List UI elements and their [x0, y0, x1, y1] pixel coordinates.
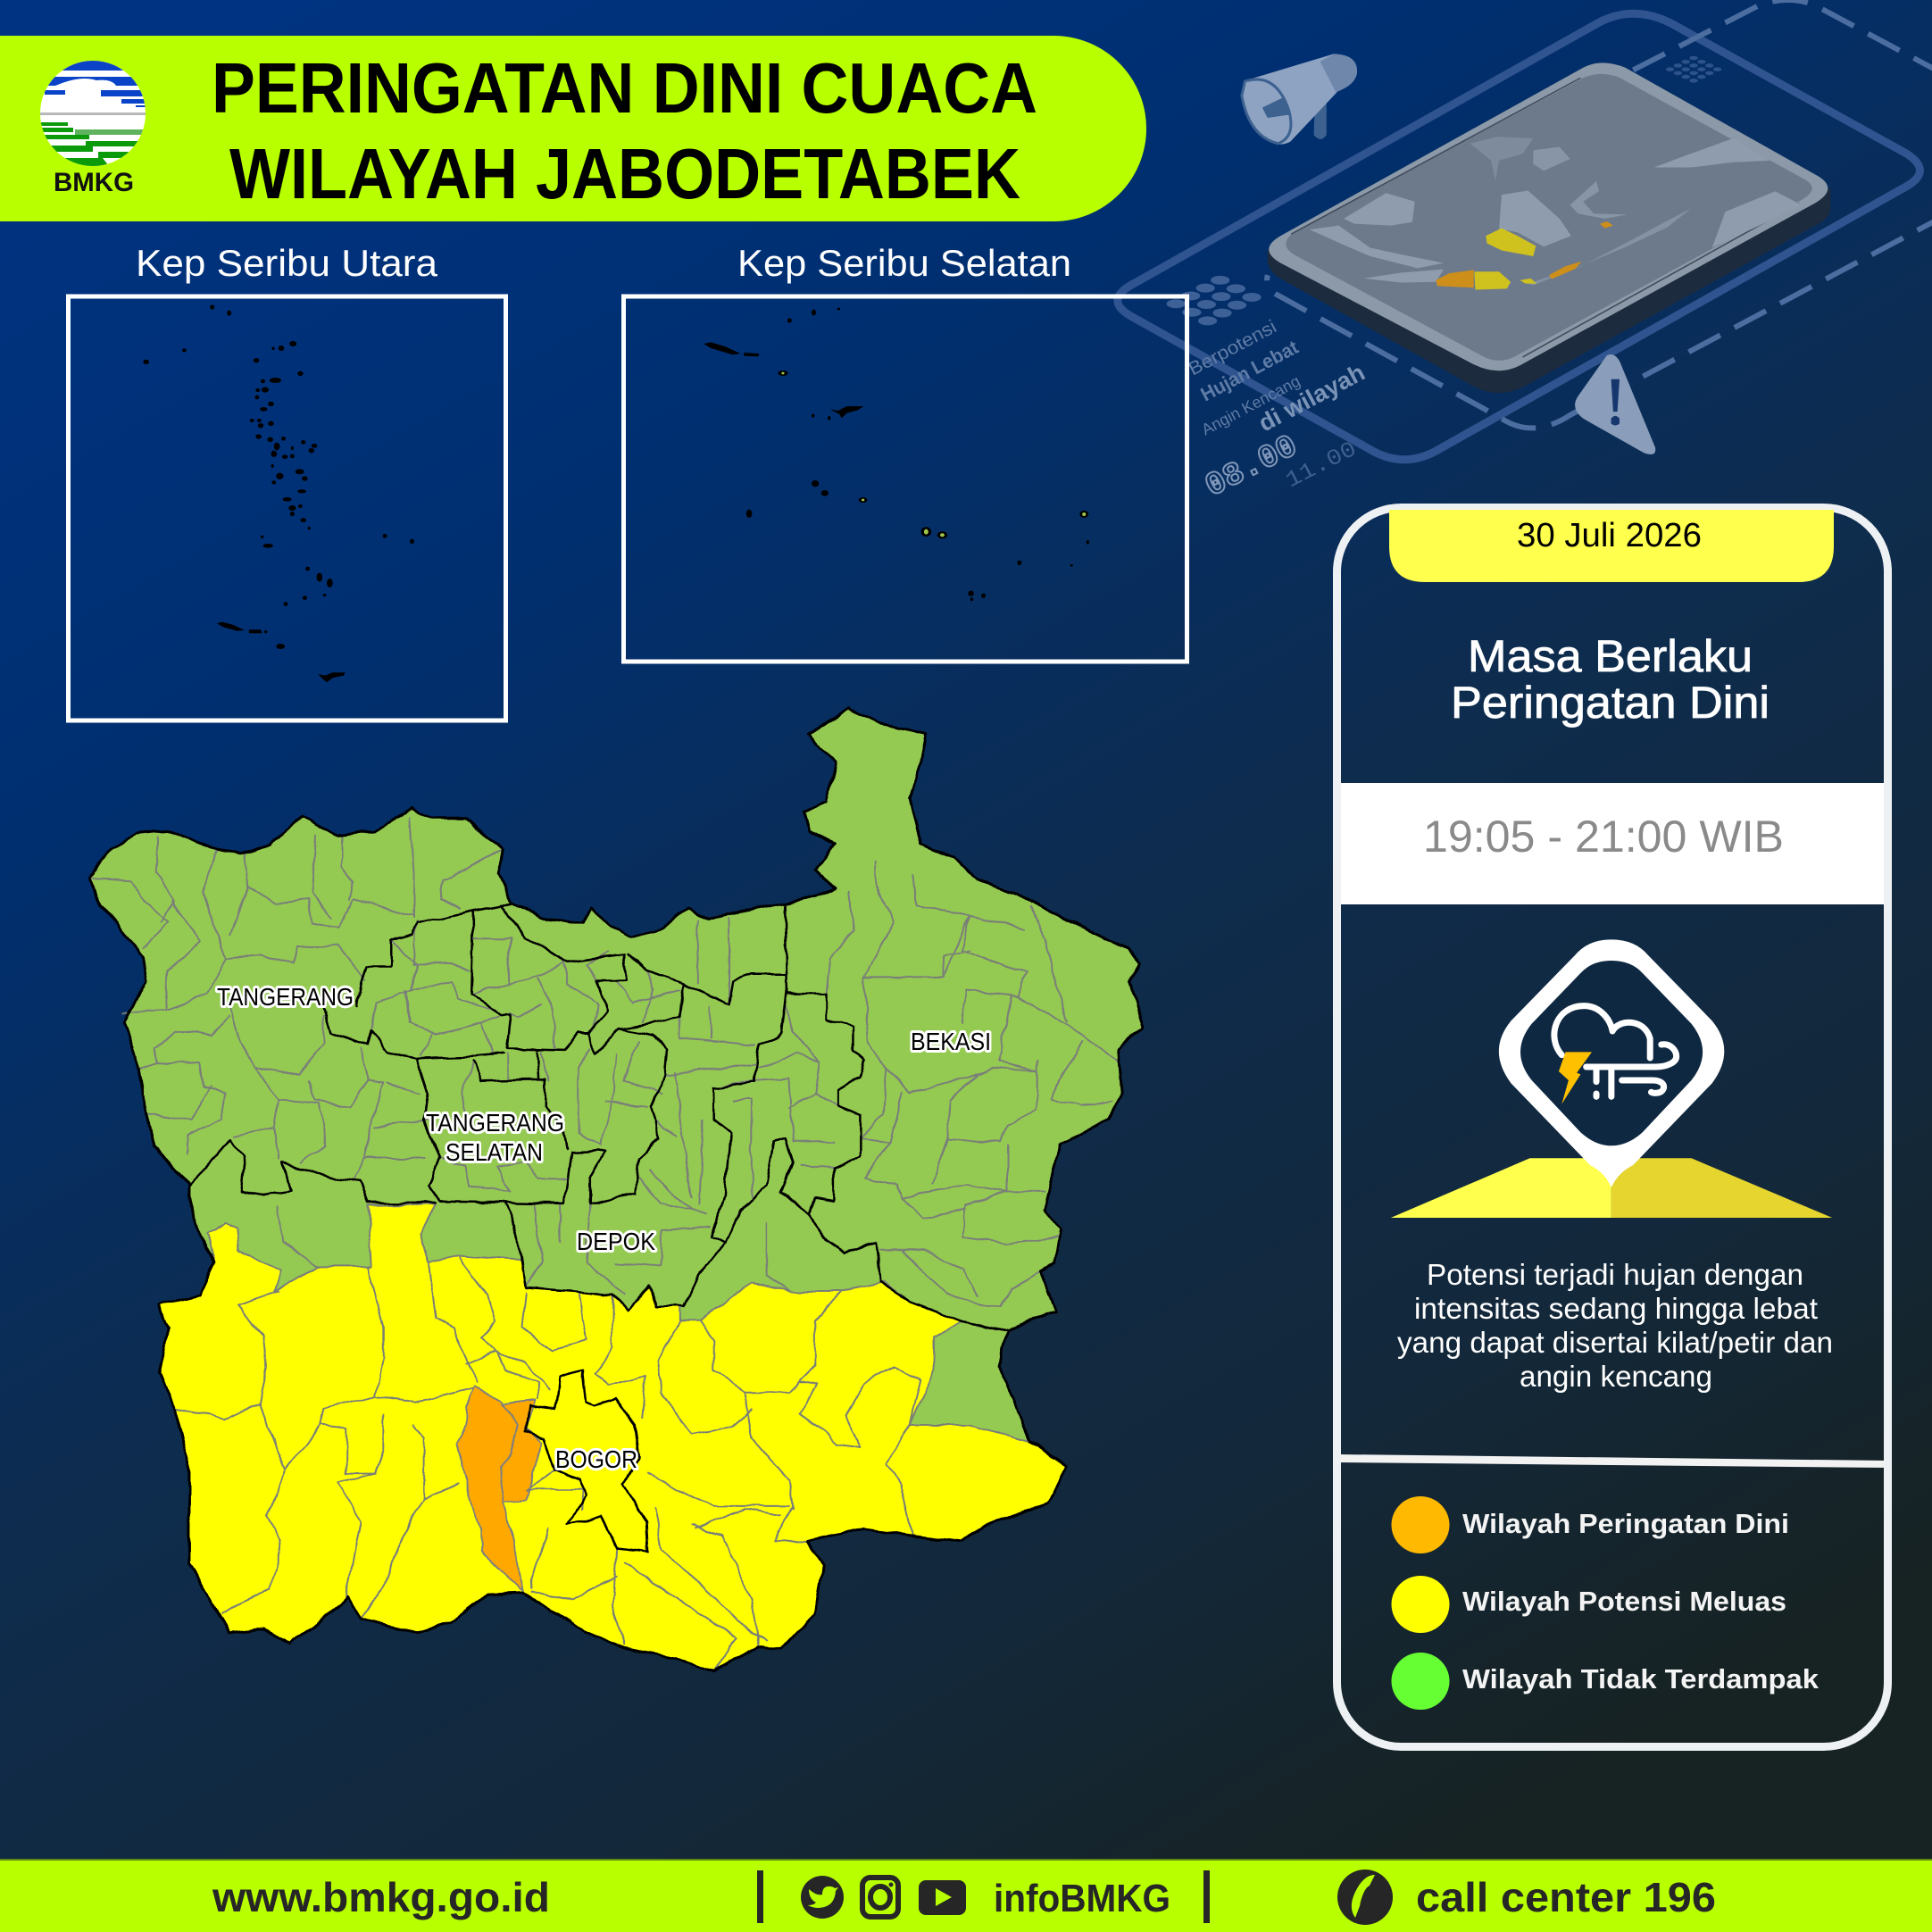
description: angin kencang	[1520, 1360, 1712, 1393]
pedestal	[1391, 1158, 1611, 1218]
megaphone	[1242, 54, 1357, 145]
phone body	[1269, 62, 1828, 371]
icon: instagram	[862, 1878, 898, 1917]
date: 30 Juli 2026	[1517, 517, 1702, 554]
website: www.bmkg.go.id	[212, 1874, 550, 1920]
caption: di wilayah: di wilayah	[1254, 359, 1370, 437]
coastline outline	[88, 708, 1144, 1671]
title line 1: PERINGATAN DINI CUACA	[212, 48, 1037, 128]
legend: Wilayah Potensi Meluas	[1462, 1586, 1786, 1617]
map: Jabodetabek warning zones	[88, 708, 1144, 1671]
heading: validity line 2: Peringatan Dini	[1451, 678, 1770, 728]
phone screen	[1286, 74, 1812, 361]
BMKG wordmark: BMKG	[54, 168, 134, 197]
panel: Kep Seribu Utara inset map	[68, 296, 505, 720]
panel white band	[1337, 783, 1888, 904]
description: intensitas sedang hingga lebat	[1414, 1292, 1818, 1325]
dashed frame outline	[1267, 0, 1932, 428]
map zone: unaffected green	[88, 708, 1144, 1671]
screen edge lines	[1291, 78, 1799, 357]
islands	[704, 308, 1089, 601]
panel outline	[1337, 507, 1887, 1746]
caption: Berpotensi: Berpotensi	[1186, 316, 1280, 379]
legend	[1391, 1496, 1820, 1710]
map labels	[217, 983, 991, 1473]
icon: twitter	[801, 1876, 844, 1919]
label: Tangerang: TANGERANG	[217, 983, 354, 1011]
legend: Wilayah Peringatan Dini	[1462, 1508, 1789, 1539]
islands	[143, 304, 414, 682]
description	[1397, 1258, 1833, 1393]
dot cluster right	[1666, 56, 1721, 83]
island centres	[781, 372, 1086, 537]
weather glyph	[1554, 1006, 1677, 1096]
valid time: 19:05 - 21:00 WIB	[1423, 812, 1784, 862]
separator	[1203, 1870, 1210, 1923]
pin	[1499, 939, 1724, 1187]
social handle: infoBMKG	[994, 1877, 1170, 1920]
dot cluster left	[1167, 276, 1262, 325]
inset heading: Kep Seribu Utara: Kep Seribu Utara	[136, 242, 438, 284]
panel: Kep Seribu Selatan inset map	[623, 296, 1187, 662]
caption: Hujan Lebat: Hujan Lebat	[1197, 336, 1303, 405]
highlighted provinces on screen	[1486, 229, 1536, 256]
map zone: warning orange	[457, 1387, 543, 1590]
icon: phone	[1337, 1870, 1393, 1925]
icon: weather pin on pedestal	[1391, 939, 1832, 1218]
separator	[757, 1870, 763, 1923]
warning triangle	[1575, 354, 1655, 454]
label: Depok: DEPOK	[577, 1228, 655, 1255]
caption: Angin Kencang: Angin Kencang	[1198, 372, 1303, 439]
label: Bogor: BOGOR	[555, 1445, 637, 1473]
label: Tangerang Selatan line 2: SELATAN	[446, 1138, 543, 1166]
footer background	[0, 1859, 1932, 1932]
icon: BMKG logo	[40, 61, 146, 166]
header lime pill	[0, 36, 1146, 221]
title line 2: WILAYAH JABODETABEK	[229, 134, 1020, 213]
map zone: potential expansion yellow	[159, 1204, 1066, 1671]
heading: validity line 1: Masa Berlaku	[1468, 631, 1753, 681]
regency and city boundaries	[187, 904, 1007, 1552]
map land on screen	[1310, 137, 1802, 286]
subdistrict boundaries	[88, 818, 1120, 1671]
caption: 08.00: 08.00	[1199, 428, 1303, 505]
label: Bekasi: BEKASI	[911, 1028, 991, 1055]
panel divider	[1337, 1454, 1888, 1468]
inset heading: Kep Seribu Selatan: Kep Seribu Selatan	[737, 242, 1071, 284]
description: yang dapat disertai kilat/petir dan	[1397, 1326, 1833, 1359]
legend: Wilayah Tidak Terdampak	[1462, 1663, 1820, 1695]
date tab	[1389, 510, 1834, 582]
icon: youtube	[919, 1880, 966, 1915]
caption: 11.00: 11.00	[1281, 437, 1361, 494]
footer bar	[0, 1859, 1932, 1932]
decorative isometric phone illustration	[1118, 0, 1932, 460]
phone side	[1268, 187, 1830, 393]
label: Tangerang Selatan line 1: TANGERANG	[426, 1109, 564, 1137]
isometric frame outline	[1118, 13, 1920, 460]
panel: validity and legend	[1337, 507, 1888, 1746]
header banner	[0, 36, 1146, 221]
description: Potensi terjadi hujan dengan	[1427, 1258, 1803, 1291]
lightning bolt	[1559, 1052, 1592, 1104]
call center: call center 196	[1416, 1874, 1716, 1920]
decorative rotated phone captions	[1186, 316, 1370, 505]
